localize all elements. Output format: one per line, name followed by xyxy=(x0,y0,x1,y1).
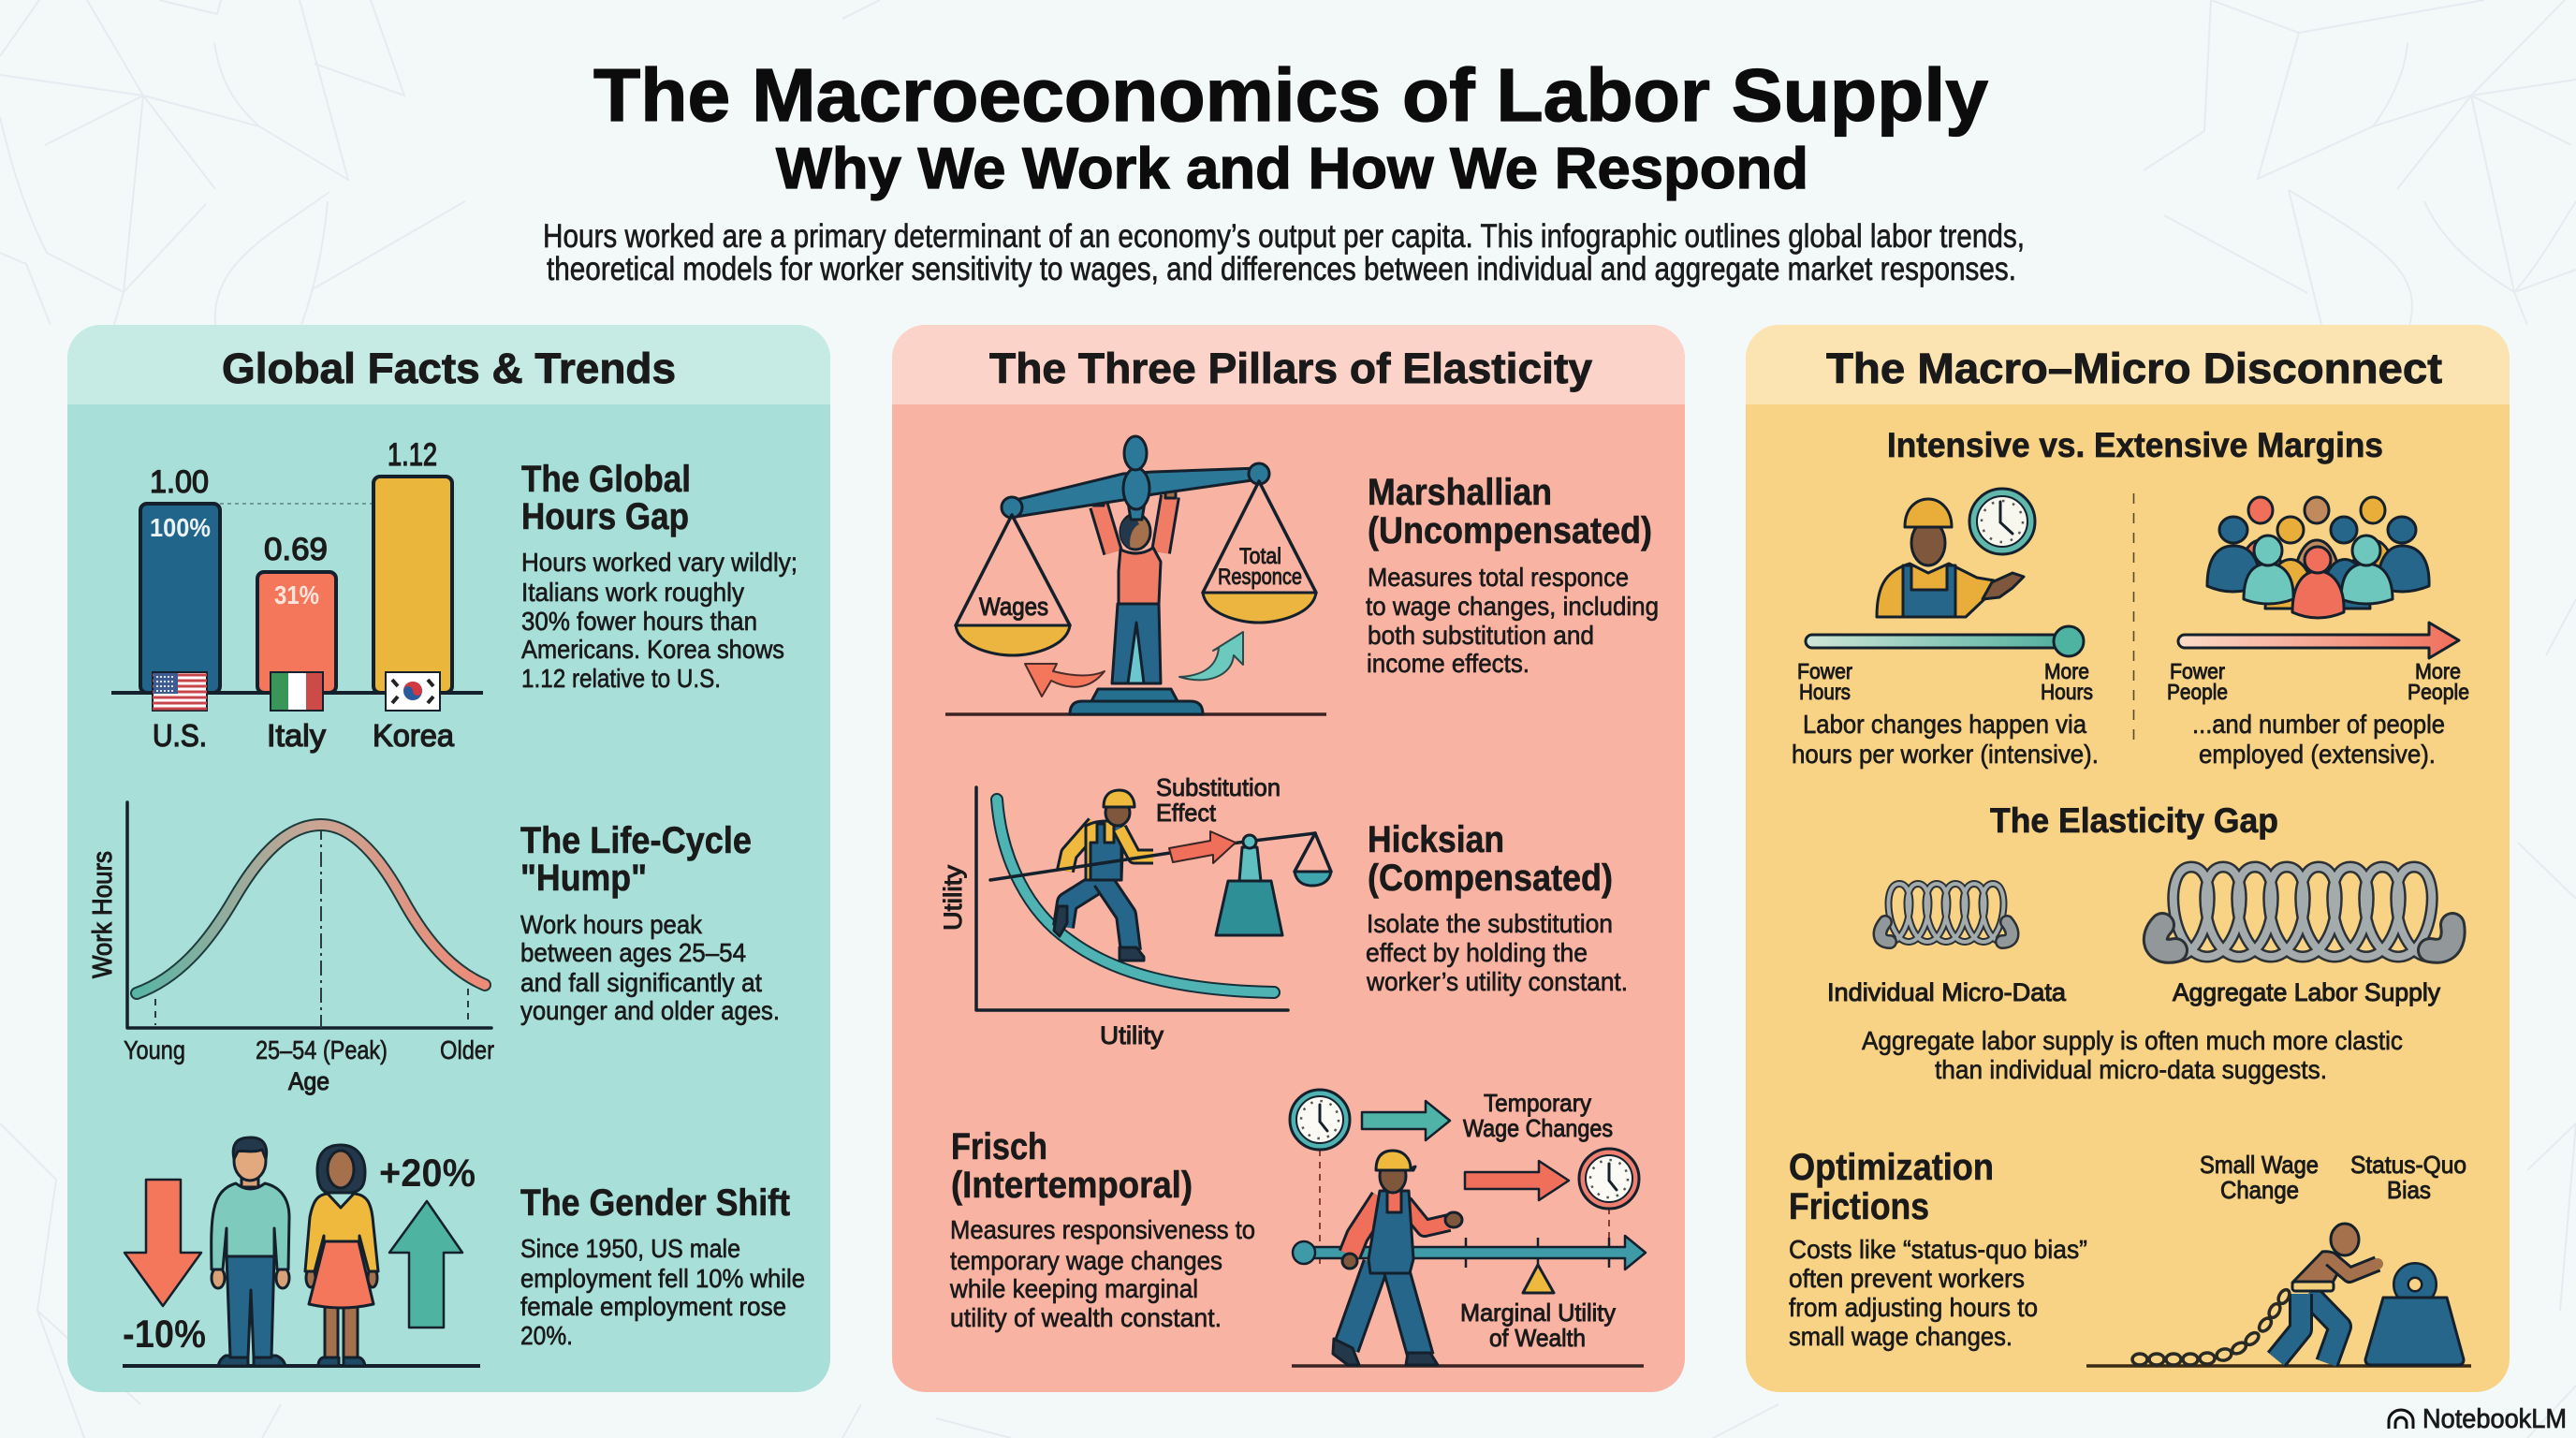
arrow: female employment up xyxy=(389,1201,462,1328)
text: extensive margin xyxy=(2192,710,2445,769)
worker pushing lever xyxy=(1054,790,1153,961)
text block: optimization frictions: Optimization xyxy=(1789,1147,1994,1188)
icon: Italy flag xyxy=(271,672,323,711)
text block: the global hours gap: Hours worked vary wildly; xyxy=(521,548,798,577)
slider: hours xyxy=(1797,626,2093,704)
text block: the global hours gap: The Global xyxy=(521,459,691,500)
text block: frisch: temporary wage changes xyxy=(950,1246,1222,1275)
chart: life-cycle hump xyxy=(88,802,494,1095)
illustration: frisch timeline and worker: of Wealth xyxy=(1489,1324,1586,1352)
slider arrow: people: More xyxy=(2415,659,2461,683)
figure: man xyxy=(212,1137,289,1366)
chart: hicksian indifference curve with worker: Utility xyxy=(939,864,967,931)
text block: frisch: utility of wealth constant. xyxy=(950,1303,1222,1332)
labels: springs xyxy=(1827,978,2440,1006)
bar chart: hours worked: 1.12 xyxy=(388,437,437,473)
chart: hicksian indifference curve with worker: Effect xyxy=(1156,799,1217,827)
title: The Macroeconomics of Labor Supply xyxy=(593,53,1989,137)
text block: optimization frictions: often prevent workers xyxy=(1789,1264,2025,1293)
illustration: worker chained to weight: Small Wage xyxy=(2200,1151,2319,1179)
text block: the life-cycle hump: "Hump" xyxy=(520,858,647,899)
text block: optimization frictions: Costs like “status-quo bias” xyxy=(1789,1235,2087,1264)
arrow: coral xyxy=(1465,1161,1569,1200)
icon: Korea flag xyxy=(386,672,440,711)
text block: the gender shift: employment fell 10% while xyxy=(520,1264,805,1293)
labels: springs: Individual Micro-Data xyxy=(1827,978,2067,1006)
text block: marshallian: (Uncompensated) xyxy=(1368,510,1652,551)
illustration: worker with clock xyxy=(1877,489,2035,617)
text block: the global hours gap xyxy=(521,459,798,693)
text block: marshallian: to wage changes, including xyxy=(1366,592,1659,621)
clock: end xyxy=(1579,1149,1639,1209)
panel heading: global facts: Global Facts & Trends xyxy=(222,345,676,392)
intro text: theoretical models for worker sensitivity to wages, and differences between individual and aggregate market responses. xyxy=(547,251,2016,287)
text block: the life-cycle hump: younger and older ages. xyxy=(520,996,780,1025)
triangle: fulcrum xyxy=(1523,1265,1554,1293)
text block: frisch xyxy=(949,1126,1255,1332)
text block: marshallian: income effects. xyxy=(1367,649,1530,678)
clock xyxy=(1969,489,2035,554)
icon: small spring xyxy=(1881,884,2012,942)
slider arrow: people: People xyxy=(2167,680,2228,704)
text block: hicksian: worker’s utility constant. xyxy=(1366,967,1628,996)
chart: life-cycle hump: Older xyxy=(440,1035,494,1064)
illustration: gender shift: -10% xyxy=(123,1312,206,1356)
slider: hours: More xyxy=(2044,659,2089,683)
text block: hicksian: Hicksian xyxy=(1368,819,1504,860)
illustration: worker chained to weight: Bias xyxy=(2387,1176,2431,1204)
text: elasticity gap: Aggregate labor supply is often much more clastic xyxy=(1862,1026,2403,1055)
labels: springs: Aggregate Labor Supply xyxy=(2173,978,2440,1006)
chart: life-cycle hump: Age xyxy=(288,1067,329,1095)
text block: the gender shift: Since 1950, US male xyxy=(520,1234,740,1263)
text block: frisch: Frisch xyxy=(951,1126,1047,1167)
pulling figure xyxy=(2308,1294,2340,1363)
text block: the life-cycle hump: The Life-Cycle xyxy=(520,820,752,861)
text block: the gender shift xyxy=(520,1182,805,1350)
panel heading: macro-micro: The Macro–Micro Disconnect xyxy=(1826,345,2442,392)
text block: optimization frictions: Frictions xyxy=(1789,1186,1929,1227)
text block: the global hours gap: Italians work roughly xyxy=(521,578,744,607)
beam xyxy=(1127,496,1146,520)
arrow: coral xyxy=(1025,664,1105,697)
text block: the gender shift: female employment rose xyxy=(520,1292,786,1321)
text block: hicksian: (Compensated) xyxy=(1368,858,1613,899)
text block: the gender shift: 20%. xyxy=(520,1321,573,1350)
panel heading: three pillars: The Three Pillars of Elasticity xyxy=(989,345,1592,392)
chart: hicksian indifference curve with worker: Utility xyxy=(1100,1021,1164,1049)
subtitle: Why We Work and How We Respond xyxy=(776,137,1808,201)
panel: global facts and trends xyxy=(67,325,830,1392)
text block: the global hours gap: 30% fower hours than xyxy=(521,607,757,636)
left pan xyxy=(956,515,1070,625)
intro text: Hours worked are a primary determinant of an economy’s output per capita. This infographic outlines global labor trends, xyxy=(543,218,2025,255)
illustration: balance scale held by worker xyxy=(945,436,1326,714)
bar chart: hours worked: 31% xyxy=(274,580,319,609)
text block: marshallian: Measures total responce xyxy=(1368,563,1629,592)
illustration: frisch timeline and worker xyxy=(1290,1089,1646,1366)
illustration: gender shift: +20% xyxy=(379,1151,476,1195)
illustration: balance scale held by worker: Total xyxy=(1239,544,1281,569)
text block: the gender shift: The Gender Shift xyxy=(520,1182,790,1224)
panel: three pillars of elasticity xyxy=(892,325,1685,1392)
text: intensive margin xyxy=(1792,710,2099,769)
bar chart: hours worked: U.S. xyxy=(153,718,207,753)
illustration: worker chained to weight: Status-Quo xyxy=(2350,1151,2466,1179)
text block: the life-cycle hump: Work hours peak xyxy=(520,910,703,939)
text block: the life-cycle hump: and fall significantly at xyxy=(520,968,762,997)
weight xyxy=(2401,1270,2429,1299)
subheading: elasticity gap: The Elasticity Gap xyxy=(1990,801,2278,840)
arrow: teal xyxy=(1179,632,1243,680)
logo: NotebookLM: NotebookLM xyxy=(2422,1404,2567,1434)
timeline xyxy=(1466,1238,1609,1268)
arrow: substitution xyxy=(1169,831,1236,863)
text: extensive margin: employed (extensive). xyxy=(2199,740,2436,769)
illustration: gender shift xyxy=(123,1137,480,1366)
text block: marshallian: both substitution and xyxy=(1368,621,1594,650)
slider: hours: Fower xyxy=(1797,659,1852,683)
slider: hours: Hours xyxy=(1799,680,1851,704)
base xyxy=(1070,689,1203,714)
bar chart: hours worked: 100% xyxy=(150,513,211,542)
right pan xyxy=(1203,481,1316,593)
panel: macro-micro disconnect xyxy=(1746,325,2510,1392)
bar chart: hours worked: 1.00 xyxy=(150,464,209,500)
subheading: intensive vs extensive: Intensive vs. Extensive Margins xyxy=(1887,426,2383,464)
intro text xyxy=(543,218,2025,287)
text block: the global hours gap: Hours Gap xyxy=(521,496,689,537)
illustration: frisch timeline and worker: Temporary xyxy=(1484,1089,1591,1117)
slider arrow: people: People xyxy=(2408,680,2469,704)
text block: frisch: while keeping marginal xyxy=(949,1274,1198,1303)
text block: marshallian: Marshallian xyxy=(1368,472,1552,513)
illustration: crowd of people xyxy=(2207,497,2429,618)
chart: life-cycle hump: Young xyxy=(124,1035,185,1064)
illustration: frisch timeline and worker: Wage Changes xyxy=(1463,1114,1613,1142)
figure: woman xyxy=(305,1145,378,1366)
slider: hours: Hours xyxy=(2041,680,2093,704)
text block: hicksian: effect by holding the xyxy=(1366,938,1588,967)
slider arrow: people: Fower xyxy=(2170,659,2225,683)
lever and small scale xyxy=(990,833,1315,880)
text: elasticity gap: than individual micro-data suggests. xyxy=(1935,1055,2327,1084)
illustration: worker chained to weight xyxy=(2086,1151,2471,1366)
illustration: balance scale held by worker: Responce xyxy=(1218,565,1302,590)
clock: start xyxy=(1290,1090,1350,1150)
arrow: male employment down xyxy=(124,1180,201,1306)
text block: the life-cycle hump: between ages 25–54 xyxy=(520,938,746,967)
bar chart: hours worked xyxy=(111,437,483,753)
illustration: balance scale held by worker: Wages xyxy=(979,593,1048,621)
icon: US flag xyxy=(153,672,207,711)
text: intensive margin: Labor changes happen via xyxy=(1803,710,2086,739)
chart: life-cycle hump: Work Hours xyxy=(88,851,118,978)
worker xyxy=(1112,604,1161,683)
text block: optimization frictions: small wage changes. xyxy=(1789,1322,2012,1351)
text: elasticity gap xyxy=(1862,1026,2403,1084)
text block: optimization frictions xyxy=(1789,1147,2087,1351)
text block: frisch: Measures responsiveness to xyxy=(950,1215,1255,1244)
text block: frisch: (Intertemporal) xyxy=(951,1165,1193,1206)
illustration: worker chained to weight: Change xyxy=(2220,1176,2299,1204)
chart: hicksian indifference curve with worker xyxy=(939,773,1331,1049)
text block: marshallian xyxy=(1366,472,1659,678)
text block: optimization frictions: from adjusting hours to xyxy=(1789,1293,2038,1322)
text: intensive margin: hours per worker (intensive). xyxy=(1792,740,2099,769)
text block: the global hours gap: 1.12 relative to U.S. xyxy=(521,664,721,693)
walking worker xyxy=(1333,1151,1462,1365)
arrow: teal xyxy=(1362,1101,1450,1140)
illustration: frisch timeline and worker: Marginal Utility xyxy=(1460,1299,1616,1327)
chart: life-cycle hump: 25–54 (Peak) xyxy=(256,1035,388,1064)
bar chart: hours worked: 0.69 xyxy=(264,532,328,567)
text block: hicksian: Isolate the substitution xyxy=(1367,909,1613,938)
text: extensive margin: ...and number of people xyxy=(2192,710,2445,739)
text block: the global hours gap: Americans. Korea shows xyxy=(521,635,784,664)
icon: large spring xyxy=(2156,867,2453,957)
text block: hicksian xyxy=(1366,819,1628,996)
text block: the life-cycle hump xyxy=(520,820,780,1025)
chart: hicksian indifference curve with worker: Substitution xyxy=(1156,773,1281,801)
chain xyxy=(2132,1288,2291,1365)
slider arrow: people xyxy=(2167,623,2469,704)
bar chart: hours worked: Korea xyxy=(373,718,455,753)
bar chart: hours worked: Italy xyxy=(267,718,327,753)
